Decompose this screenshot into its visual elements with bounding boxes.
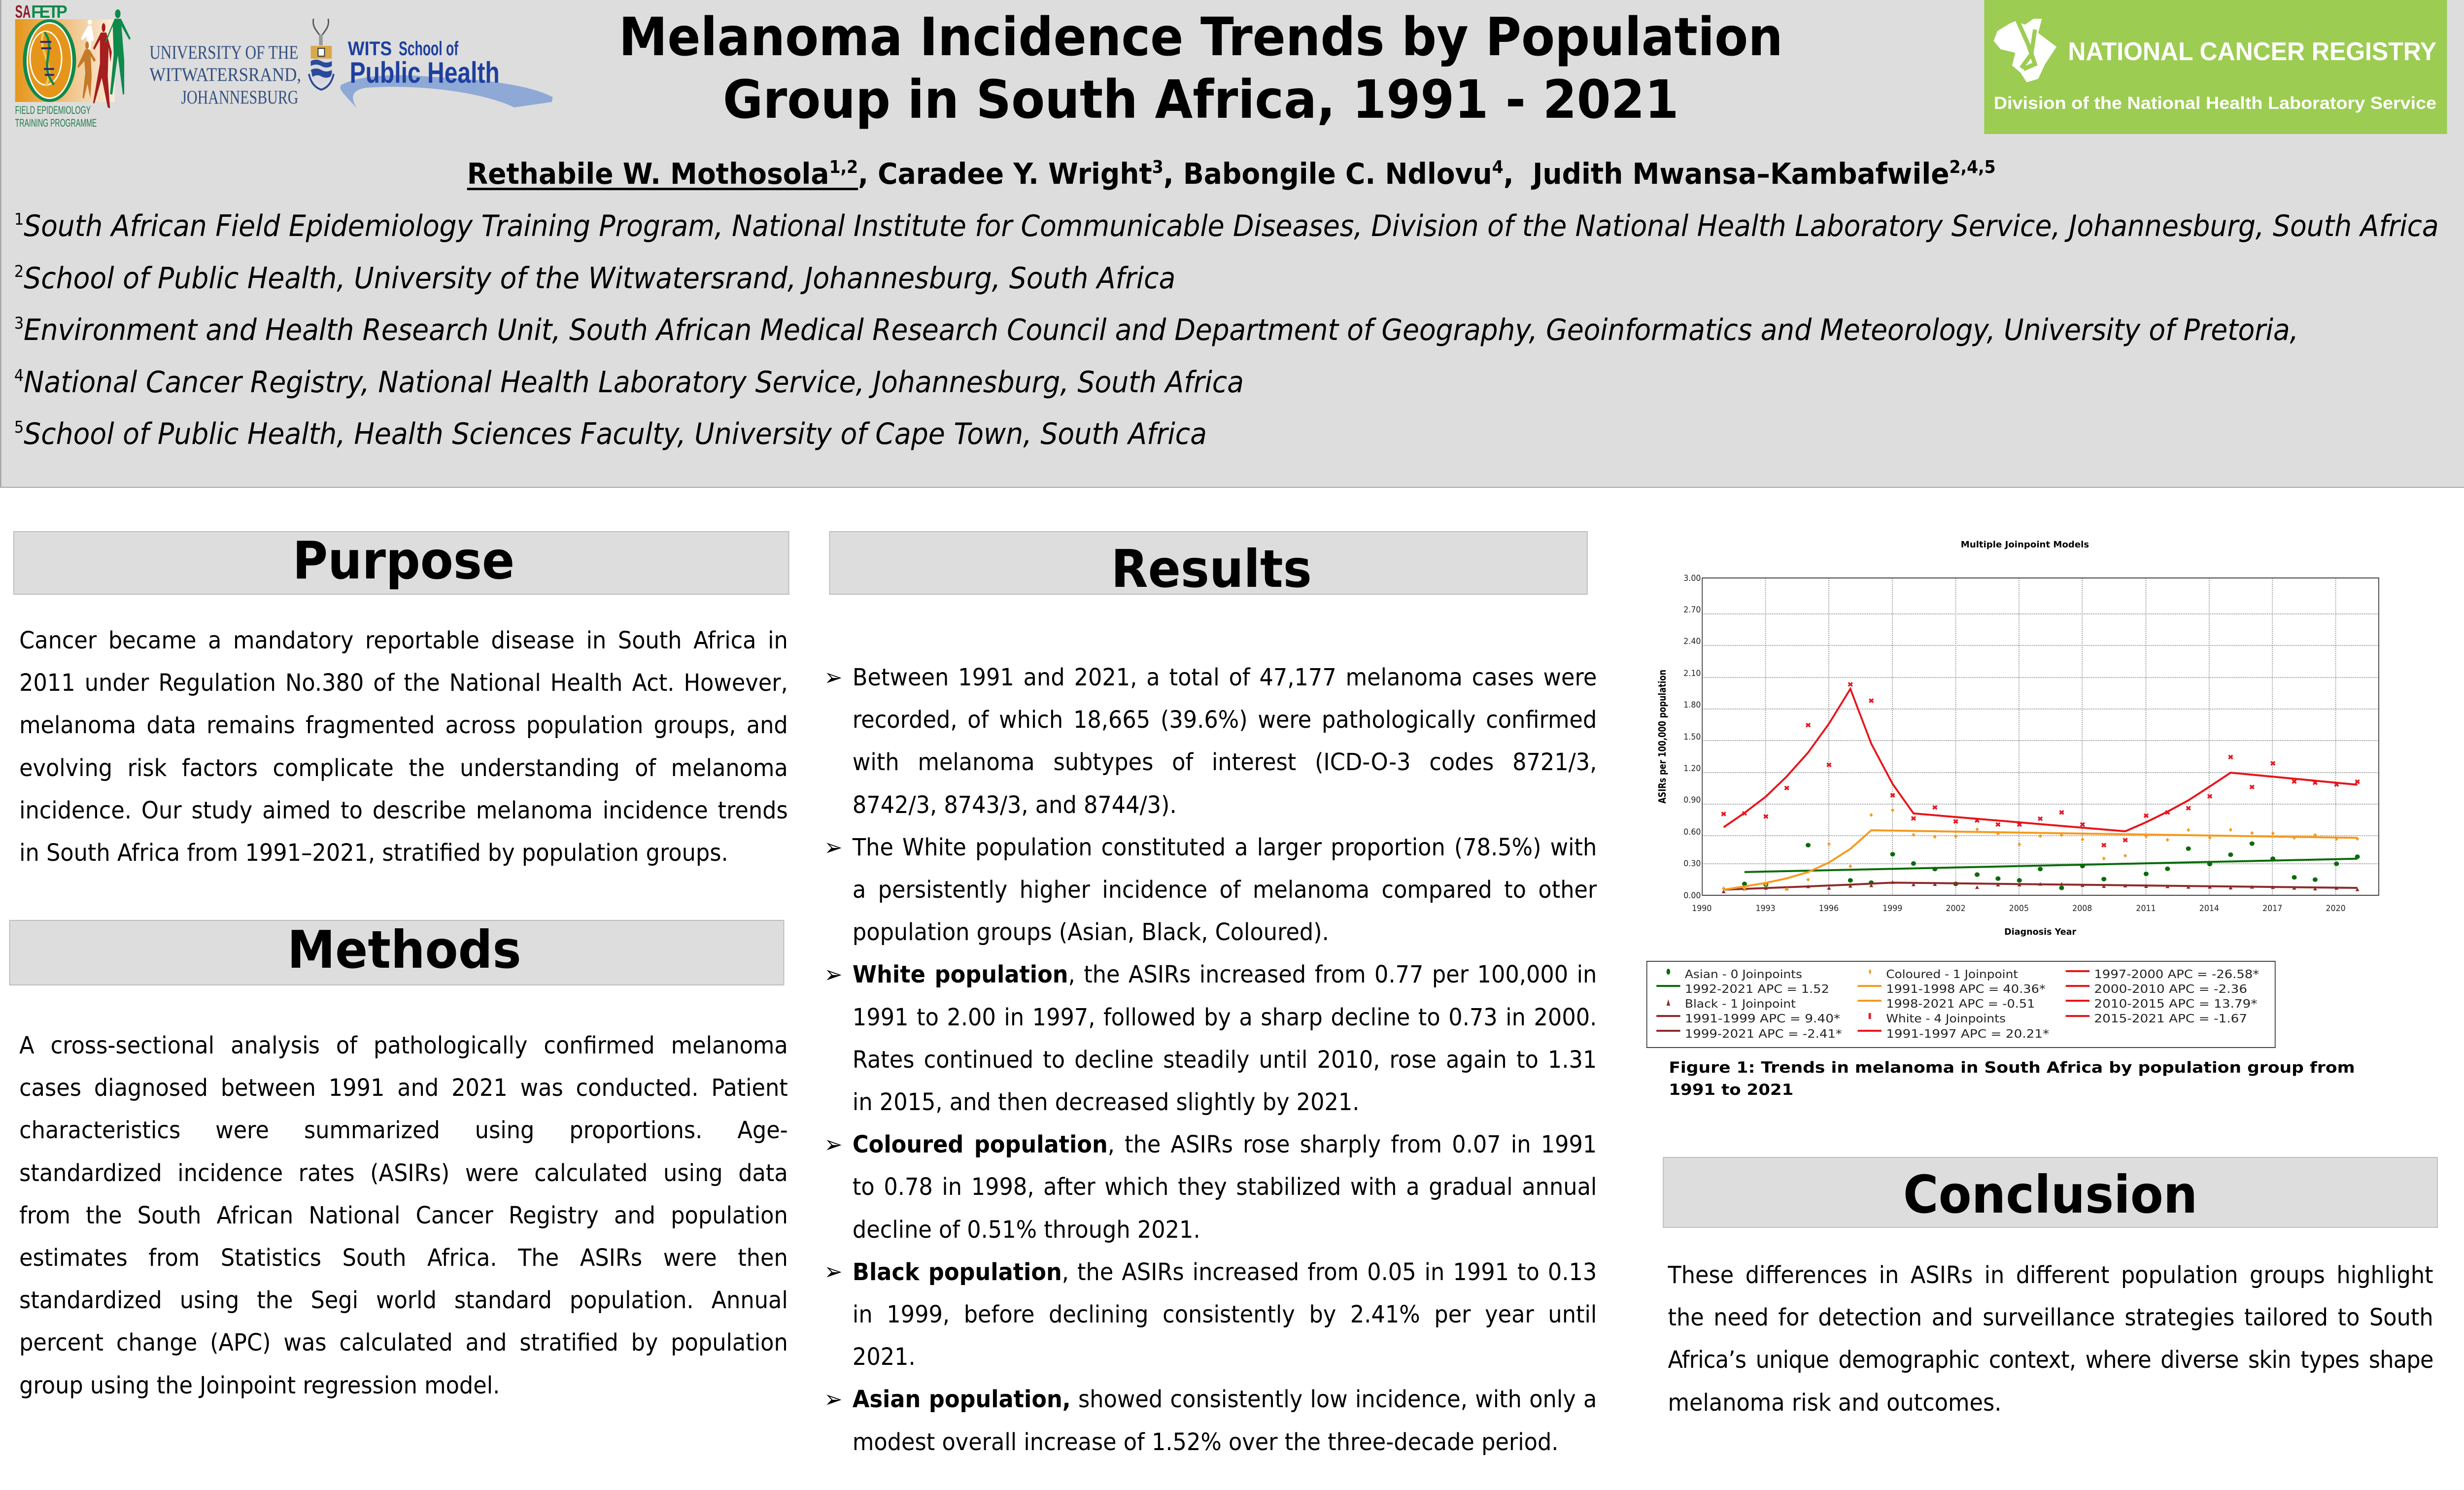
legend: 2000-2010 APC = -2.36	[2094, 982, 2247, 996]
list: results bullets	[824, 664, 1597, 1456]
text: results body: 8742/3, 8743/3, and 8744/3).	[853, 791, 1177, 819]
logo: National Cancer Registry	[1984, 0, 2447, 134]
logo: WITS School of Public Health: School of	[399, 38, 458, 60]
legend	[1647, 961, 2275, 1048]
text: results body: in 2015, and then decreased slightly by 2021.	[853, 1088, 1359, 1116]
legend: White - 4 Joinpoints	[1886, 1012, 2006, 1025]
icons: arrow bullets: ➢	[824, 664, 843, 691]
text: methods body: A cross-sectional analysis of pathologically confirmed melanoma	[19, 1032, 788, 1059]
y axis tick labels: 0.00	[1683, 890, 1701, 900]
text: results body: a persistently higher incidence of melanoma compared to other	[853, 876, 1597, 904]
legend: 1999-2021 APC = -2.41*	[1685, 1027, 1842, 1041]
icons: arrow bullets: ➢	[824, 961, 843, 988]
series: Coloured	[1722, 808, 2359, 891]
text: purpose body	[19, 627, 788, 867]
y axis tick labels: 0.90	[1683, 795, 1701, 805]
logo: SAFETP field epidemiology training programme: FETP	[31, 2, 68, 22]
panel: methods heading bar	[9, 920, 784, 985]
text: results body: White population, the ASIRs increased from 0.77 per 100,000 in	[853, 961, 1597, 988]
text: results body: modest overall increase of 1.52% over the three-decade period.	[853, 1428, 1558, 1456]
text: results body: to 0.78 in 1998, after which they stabilized with a gradual annual	[853, 1173, 1597, 1201]
text: results body: Coloured population, the ASIRs rose sharply from 0.07 in 1991	[853, 1131, 1597, 1158]
y axis tick labels: 1.20	[1683, 763, 1701, 773]
text: methods body: estimates from Statistics South Africa. The ASIRs were then	[19, 1244, 788, 1272]
series: White	[1722, 682, 2360, 847]
text: results body: Black population, the ASIRs increased from 0.05 in 1991 to 0.13	[853, 1258, 1597, 1286]
affiliations: 5School of Public Health, Health Sciences Faculty, University of Cape Town, South Africa	[14, 417, 1207, 451]
x axis tick labels: 2011	[2136, 903, 2156, 913]
figure caption: 1991 to 2021	[1669, 1081, 1793, 1099]
y axis tick labels: 1.80	[1683, 700, 1701, 710]
logo: WITS School of Public Health: Public Health	[350, 57, 500, 89]
text: methods body: standardized using the Segi world standard population. Annual	[19, 1287, 788, 1314]
text: results body: in 1999, before declining consistently by 2.41% per year until	[853, 1301, 1597, 1328]
icons: arrow bullets: ➢	[824, 1258, 843, 1286]
series: Black	[1722, 880, 2360, 893]
logo: University of the Witwatersrand: JOHANNESBURG	[181, 87, 298, 108]
data series	[1722, 682, 2360, 893]
icons: arrow bullets: ➢	[824, 1386, 843, 1413]
x axis tick labels: 2020	[2326, 903, 2346, 913]
text: conclusion body: These differences in ASIRs in different population groups highlight	[1668, 1261, 2433, 1289]
icon: Africa map with ribbon	[1994, 19, 2056, 82]
logo: SAFETP field epidemiology training programme: SA	[15, 2, 31, 22]
icons: arrow bullets: ➢	[824, 834, 843, 861]
x axis tick labels: 2008	[2072, 903, 2092, 913]
text: purpose body: incidence. Our study aimed to describe melanoma incidence trends	[19, 797, 788, 824]
figure caption: Figure 1: Trends in melanoma in South Africa by population group from	[1669, 1059, 2355, 1077]
heading: Conclusion: Conclusion	[1903, 1165, 2197, 1225]
y axis title: ASIRs per 100,000 population	[1657, 670, 1669, 804]
heading: Methods: Methods	[287, 920, 521, 980]
logo: University of the Witwatersrand: WITWATERSRAND,	[149, 64, 301, 85]
author list: Rethabile W. Mothosola1,2, Caradee Y. Wright3, Babongile C. Ndlovu4, Judith Mwansa–Kambafwile2,4,5	[467, 157, 1996, 191]
affiliations	[14, 209, 2439, 451]
x axis tick labels	[1692, 903, 2346, 913]
icons: arrow bullets: ➢	[824, 1131, 843, 1158]
panel: conclusion heading bar	[1663, 1157, 2438, 1228]
legend: 2010-2015 APC = 13.79*	[2094, 997, 2258, 1011]
legend: Coloured - 1 Joinpoint	[1886, 968, 2018, 981]
affiliations: 3Environment and Health Research Unit, South African Medical Research Council and Department of Geography, Geoinformatics and Meteorology, University of Pretoria,	[14, 313, 2298, 347]
logo: SAFETP field epidemiology training programme: TRAINING PROGRAMME	[15, 117, 97, 129]
text: purpose body: in South Africa from 1991–2021, stratified by population groups.	[19, 839, 728, 867]
text: results body: recorded, of which 18,665 (39.6%) were pathologically confirmed	[853, 706, 1597, 734]
affiliations: 1South African Field Epidemiology Training Program, National Institute for Communicable Diseases, Division of the National Health Laboratory Service, Johannesburg, South Africa	[14, 209, 2439, 243]
logo: SAFETP field epidemiology training programme: FIELD EPIDEMIOLOGY	[15, 104, 91, 116]
x axis title: Diagnosis Year	[2004, 927, 2077, 937]
x axis tick labels: 1996	[1819, 903, 1839, 913]
text: results body: Between 1991 and 2021, a total of 47,177 melanoma cases were	[853, 664, 1597, 691]
panel: purpose heading bar	[13, 531, 789, 595]
y axis tick labels: 0.60	[1683, 827, 1701, 837]
title: Melanoma Incidence Trends by Population	[619, 7, 1783, 68]
icon: university crest	[309, 19, 334, 90]
logo: SAFETP field epidemiology training programme	[15, 2, 131, 129]
logo: University of the Witwatersrand	[149, 19, 335, 108]
legend: Asian - 0 Joinpoints	[1685, 968, 1802, 981]
logo: National Cancer Registry: Division of the National Health Laboratory Service	[1994, 94, 2436, 113]
series: Asian	[1742, 842, 2360, 890]
text: results body: decline of 0.51% through 2021.	[853, 1216, 1200, 1244]
x axis tick labels: 2005	[2009, 903, 2029, 913]
text: results body: 1991 to 2.00 in 1997, followed by a sharp decline to 0.73 in 2000.	[853, 1004, 1597, 1031]
x axis tick labels: 2002	[1946, 903, 1966, 913]
text: results body: population groups (Asian, Black, Coloured).	[853, 918, 1329, 946]
text: methods body	[19, 1032, 788, 1399]
legend: 1992-2021 APC = 1.52	[1685, 982, 1829, 996]
title	[619, 7, 1783, 131]
text: methods body: standardized incidence rates (ASIRs) were calculated using data	[19, 1159, 788, 1187]
text: results body: with melanoma subtypes of interest (ICD-O-3 codes 8721/3,	[853, 748, 1597, 776]
chart title: Multiple Joinpoint Models	[1961, 540, 2089, 550]
legend: 1998-2021 APC = -0.51	[1886, 997, 2035, 1011]
text: results body	[853, 664, 1597, 1456]
heading: Results: Results	[1111, 539, 1312, 599]
y axis tick labels: 1.50	[1683, 732, 1701, 742]
text: results body: The White population constituted a larger proportion (78.5%) with	[853, 834, 1597, 861]
text: purpose body: Cancer became a mandatory reportable disease in South Africa in	[19, 627, 788, 654]
legend: 1991-1997 APC = 20.21*	[1886, 1027, 2049, 1041]
logo: WITS School of Public Health	[340, 38, 553, 108]
logo: National Cancer Registry: NATIONAL CANCER REGISTRY	[2068, 37, 2436, 66]
icons: arrow bullets	[824, 664, 843, 1413]
text: purpose body: evolving risk factors complicate the understanding of melanoma	[19, 754, 788, 782]
text: conclusion body: the need for detection and surveillance strategies tailored to South	[1668, 1304, 2433, 1331]
y axis tick labels: 2.70	[1683, 605, 1701, 614]
legend: Black - 1 Joinpoint	[1685, 997, 1796, 1011]
text: conclusion body: Africa’s unique demographic context, where diverse skin types shape	[1668, 1346, 2433, 1374]
legend: 1997-2000 APC = -26.58*	[2094, 968, 2259, 981]
header band	[0, 0, 2464, 488]
y axis tick labels: 2.10	[1683, 668, 1701, 678]
logo: WITS School of Public Health: WITS	[348, 38, 392, 60]
title: Group in South Africa, 1991 - 2021	[723, 69, 1679, 131]
text: results body: Rates continued to decline steadily until 2010, rose again to 1.31	[853, 1046, 1597, 1074]
y axis tick labels: 2.40	[1683, 636, 1701, 646]
grid and plot frame	[1702, 578, 2379, 895]
legend: 1991-1998 APC = 40.36*	[1886, 982, 2046, 996]
logo: University of the Witwatersrand: UNIVERSITY OF THE	[149, 42, 298, 63]
text: methods body: characteristics were summarized using proportions. Age-	[19, 1117, 788, 1144]
legend: 2015-2021 APC = -1.67	[2094, 1012, 2247, 1025]
x axis tick labels: 2014	[2199, 903, 2219, 913]
legend: 1991-1999 APC = 9.40*	[1685, 1012, 1840, 1025]
text: results body: 2021.	[853, 1343, 916, 1371]
x axis tick labels: 1999	[1882, 903, 1902, 913]
affiliations: 4National Cancer Registry, National Health Laboratory Service, Johannesburg, South Africa	[14, 366, 1244, 399]
text: conclusion body	[1668, 1261, 2433, 1417]
x axis tick labels: 1993	[1755, 903, 1776, 913]
x axis tick labels: 1990	[1692, 903, 1711, 913]
affiliations: 2School of Public Health, University of the Witwatersrand, Johannesburg, South Africa	[14, 261, 1175, 296]
text: purpose body: 2011 under Regulation No.380 of the National Health Act. However,	[19, 669, 788, 697]
text: conclusion body: melanoma risk and outcomes.	[1668, 1389, 2001, 1417]
x axis tick labels: 2017	[2262, 903, 2282, 913]
figure caption	[1669, 1059, 2355, 1099]
y axis tick labels: 0.30	[1683, 858, 1701, 868]
text: results body: Asian population, showed consistently low incidence, with only a	[853, 1386, 1597, 1413]
text: purpose body: melanoma data remains fragmented across population groups, and	[19, 711, 788, 739]
text: methods body: cases diagnosed between 1991 and 2021 was conducted. Patient	[19, 1074, 788, 1102]
heading: Purpose: Purpose	[293, 531, 514, 591]
text: methods body: group using the Joinpoint regression model.	[19, 1372, 500, 1399]
panel: results heading bar	[829, 531, 1588, 595]
y axis tick labels: 3.00	[1683, 573, 1701, 583]
y axis tick labels	[1683, 573, 1701, 900]
text: methods body: from the South African National Cancer Registry and population	[19, 1202, 788, 1229]
text: methods body: percent change (APC) was calculated and stratified by population	[19, 1329, 788, 1356]
